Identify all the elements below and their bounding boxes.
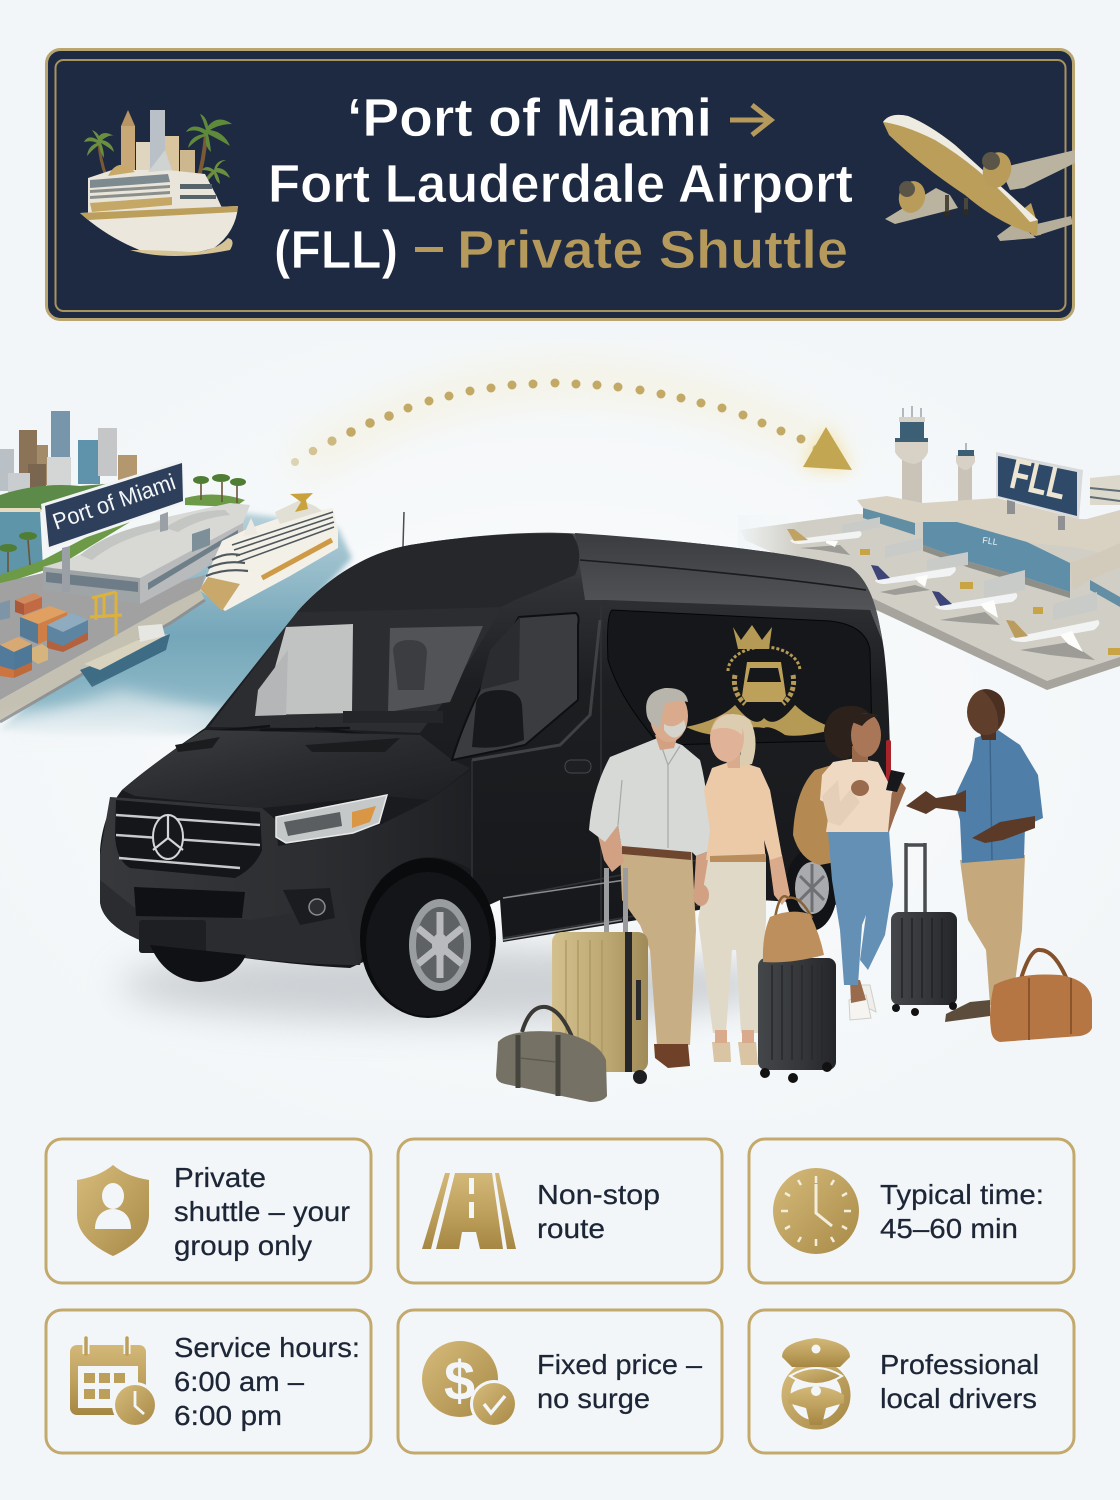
scene: FLL airport illustration xyxy=(738,406,1120,690)
people and luggage xyxy=(496,688,1092,1102)
scene: Port of Miami illustration xyxy=(0,411,352,745)
extended arm xyxy=(906,790,966,814)
card text: 6:00 am – xyxy=(174,1366,304,1397)
left fade xyxy=(0,690,240,745)
apron xyxy=(740,514,1120,687)
shirt xyxy=(954,730,1043,863)
tail xyxy=(1022,203,1041,236)
red tail light xyxy=(886,740,891,785)
dock ground xyxy=(0,573,205,700)
card text: Professional xyxy=(880,1349,1039,1380)
scene: glow behind route arc xyxy=(300,380,840,465)
jeans xyxy=(828,830,893,985)
grille bars xyxy=(116,815,260,868)
belt xyxy=(622,846,691,860)
shoe xyxy=(654,1044,690,1068)
neck and head xyxy=(655,735,678,750)
card text: Service hours: xyxy=(174,1332,360,1363)
dock edge xyxy=(0,590,205,722)
card text: route xyxy=(537,1213,605,1244)
trousers xyxy=(698,860,766,1033)
title line three: (FLL) xyxy=(274,220,398,280)
rear-left tyre under bumper xyxy=(150,945,246,982)
control tower large xyxy=(895,406,928,514)
right hand xyxy=(694,850,712,905)
ship superstructure xyxy=(88,170,222,216)
route arrowhead xyxy=(803,427,852,470)
card text: local drivers xyxy=(880,1383,1037,1414)
sign: Port of Miami: Port of Miami xyxy=(49,468,179,535)
traveller: older woman xyxy=(693,714,790,1065)
grille xyxy=(115,800,262,878)
clasped hands xyxy=(693,884,709,906)
door and body lines xyxy=(472,605,760,938)
tan handbag xyxy=(763,896,824,962)
coastline green xyxy=(0,482,130,510)
apron edge road xyxy=(870,597,1120,690)
lower grille xyxy=(134,887,245,918)
control tower small xyxy=(956,443,975,503)
icon: shield with person xyxy=(77,1165,149,1256)
arm and hand xyxy=(768,850,790,905)
ankle xyxy=(850,980,866,1003)
palm group xyxy=(0,474,246,572)
traveller: older man xyxy=(589,688,712,1068)
water xyxy=(0,513,352,735)
lower bumper xyxy=(100,880,358,965)
door handle xyxy=(565,760,591,773)
container stacks xyxy=(0,593,88,678)
jet bridges xyxy=(842,517,1097,620)
trousers xyxy=(620,850,696,1045)
black suitcase rear xyxy=(891,843,957,1016)
forearm and hand xyxy=(598,825,624,872)
terminal building xyxy=(43,503,250,604)
card text: no surge xyxy=(537,1383,650,1414)
route arrowhead glow xyxy=(803,427,852,470)
arrow in title xyxy=(730,105,771,135)
roof front xyxy=(297,533,579,612)
card: professional drivers xyxy=(749,1310,1074,1453)
door window xyxy=(452,613,579,760)
icon: road xyxy=(422,1173,516,1249)
windshield xyxy=(209,607,503,733)
wreath xyxy=(734,675,794,704)
forearm with phone hand xyxy=(878,778,906,832)
cargo ship xyxy=(80,624,170,687)
gold crown logo xyxy=(686,625,836,736)
hull xyxy=(80,206,238,255)
title: ‘Port of Miami xyxy=(347,88,712,148)
route arc dotted xyxy=(291,378,822,466)
hair xyxy=(716,714,756,767)
gold suitcase xyxy=(552,868,648,1084)
palm trees xyxy=(84,114,232,192)
roof side panel xyxy=(575,533,882,640)
shoe xyxy=(945,1000,990,1022)
front lower fascia xyxy=(100,770,472,965)
headlight xyxy=(276,795,387,843)
FLL sign: FLL xyxy=(1006,449,1071,509)
card text: Private xyxy=(174,1162,266,1193)
ankles xyxy=(715,1030,727,1043)
card text: Non-stop xyxy=(537,1179,660,1210)
star badge xyxy=(153,815,183,859)
blouse xyxy=(704,760,782,862)
rear panel window xyxy=(608,610,872,745)
fuselage xyxy=(883,115,1038,235)
lower hand xyxy=(972,816,1035,843)
door sweep highlight xyxy=(472,620,600,760)
terminal glass main xyxy=(923,522,1070,592)
crown xyxy=(733,625,772,649)
card text: Typical time: xyxy=(880,1179,1044,1210)
brown duffel bag xyxy=(990,950,1092,1042)
phone xyxy=(886,770,905,792)
van body xyxy=(100,533,890,968)
belt xyxy=(710,854,766,862)
airplane: gold tail 2 xyxy=(1006,620,1099,660)
title line two: Fort Lauderdale Airport xyxy=(268,154,853,214)
black shuttle van xyxy=(100,512,891,1018)
wings xyxy=(1000,150,1075,190)
head xyxy=(978,725,996,740)
van emblem xyxy=(742,662,786,702)
card: non-stop route xyxy=(398,1139,722,1283)
fog lamp xyxy=(283,888,335,925)
shoes xyxy=(856,985,876,1012)
neck and face xyxy=(724,752,740,768)
neck and face xyxy=(852,746,868,762)
hand xyxy=(851,780,869,796)
black suitcase on front xyxy=(758,958,836,1083)
icon: calendar with clock xyxy=(70,1338,158,1428)
card text: 6:00 pm xyxy=(174,1400,282,1431)
shirt xyxy=(589,737,712,856)
icon: dollar coin with check: $ xyxy=(444,1349,475,1412)
terminal right block xyxy=(1070,543,1120,590)
title accent: Private Shuttle xyxy=(457,220,848,280)
card: fixed price xyxy=(398,1310,722,1453)
sign: Port of Miami xyxy=(41,460,185,592)
cruise ship xyxy=(200,493,338,611)
front wheel arch xyxy=(360,858,496,1018)
side mirror xyxy=(472,690,524,748)
card text: shuttle – your xyxy=(174,1196,350,1227)
card text: group only xyxy=(174,1230,312,1261)
shirt xyxy=(820,758,892,832)
engines xyxy=(979,149,1015,191)
card text: 45–60 min xyxy=(880,1213,1018,1244)
van ground shadow xyxy=(120,947,780,1023)
lagoon xyxy=(0,510,43,582)
grey duffel bag xyxy=(496,1007,607,1102)
icon: airplane xyxy=(883,115,1075,241)
airplane: gold tail 1 xyxy=(787,529,862,555)
icon: clock xyxy=(773,1168,859,1254)
van antenna xyxy=(402,512,404,580)
sign on terminal facade: FLL xyxy=(982,535,998,547)
card text: Fixed price – xyxy=(537,1349,702,1380)
wipers xyxy=(205,726,375,736)
title dash xyxy=(415,247,443,252)
gantry crane xyxy=(90,592,122,636)
hood xyxy=(122,730,470,808)
backpack xyxy=(793,762,846,865)
icon: cruise ship and Miami skyline xyxy=(80,110,238,256)
icon: driver cap and steering wheel xyxy=(782,1338,850,1425)
roof groove xyxy=(580,560,866,590)
licence plate recess xyxy=(139,920,206,953)
front wheel xyxy=(366,872,490,1016)
traveller: young woman xyxy=(793,706,906,1020)
airplane: navy tail 1 xyxy=(871,565,956,595)
card: service hours xyxy=(46,1310,371,1453)
card: typical time xyxy=(749,1139,1074,1283)
rear wheel xyxy=(785,849,837,931)
header banner xyxy=(46,50,1075,320)
ground vehicles xyxy=(860,549,1120,655)
terminal glass left xyxy=(863,508,915,535)
trousers xyxy=(960,855,1025,1005)
skyline buildings xyxy=(0,411,245,585)
FLL sign xyxy=(996,449,1083,530)
flourish xyxy=(686,705,836,736)
card: private shuttle xyxy=(46,1139,371,1283)
icon: dollar coin with check xyxy=(422,1341,518,1428)
traveller: man in blue shirt xyxy=(906,689,1043,1022)
terminal roof xyxy=(857,496,1120,557)
airplane: navy tail 2 xyxy=(932,591,1017,625)
hair xyxy=(824,706,868,760)
shoes xyxy=(712,1042,758,1065)
